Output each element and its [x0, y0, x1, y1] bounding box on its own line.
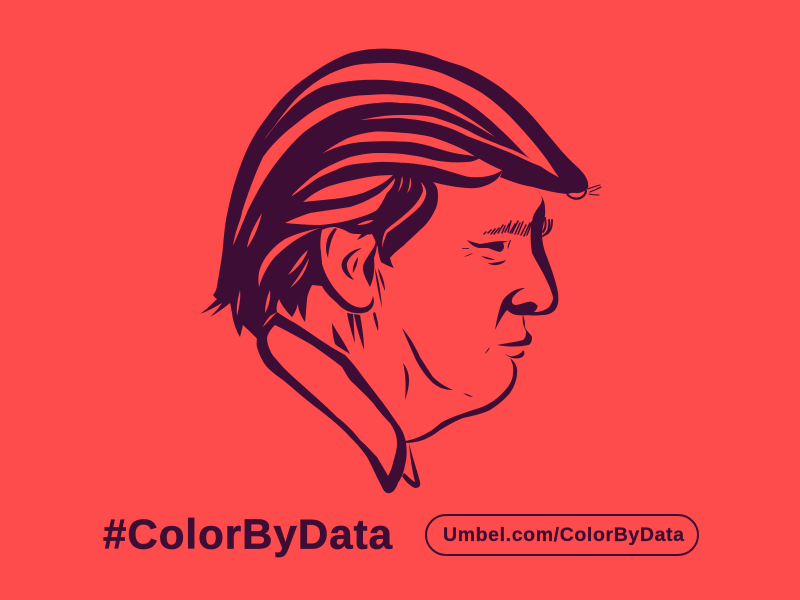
eyebrow — [484, 218, 552, 236]
chin and jaw — [405, 358, 517, 443]
forelock knot — [567, 185, 601, 199]
ear — [312, 228, 374, 313]
collar — [257, 312, 407, 493]
jowl lines — [402, 328, 473, 400]
second collar — [402, 443, 420, 488]
neck hair wisps — [332, 312, 378, 354]
face profile: forehead and nose — [517, 190, 558, 315]
url pill — [426, 515, 698, 555]
strand E tip — [289, 141, 482, 198]
eye — [462, 240, 511, 265]
hair silhouette — [200, 49, 588, 340]
mouth — [485, 315, 532, 358]
hair gaps: strand highlights — [233, 62, 560, 332]
nose wing — [495, 288, 538, 330]
pill outline — [426, 515, 698, 555]
hair strands beside ear — [357, 231, 385, 308]
portrait illustration — [200, 49, 601, 493]
hashtag heading: #ColorByData — [103, 510, 393, 558]
url text: Umbel.com/ColorByData — [443, 524, 684, 546]
